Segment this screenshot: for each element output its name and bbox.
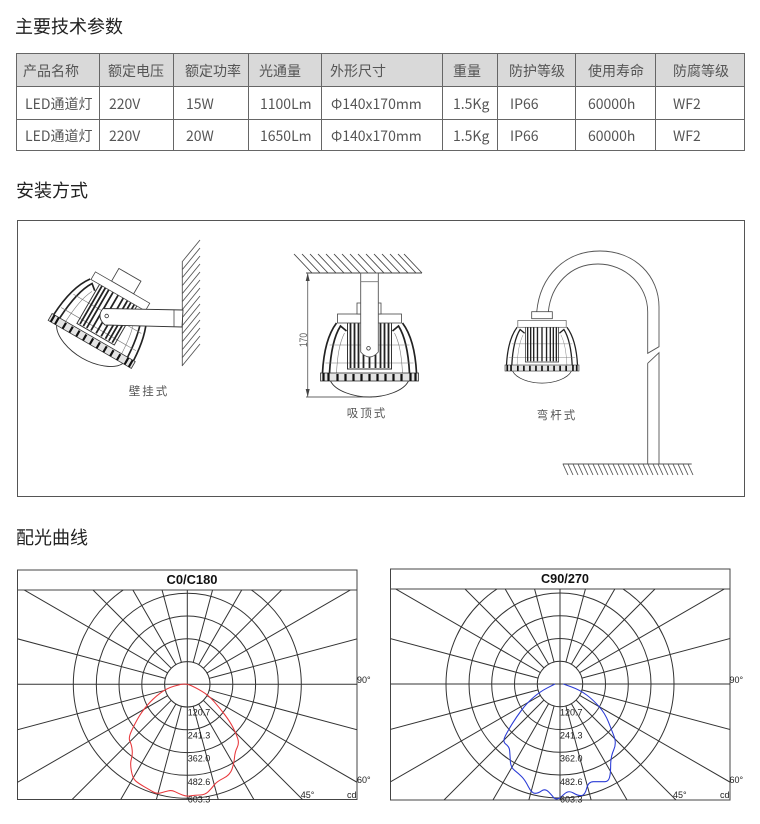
ceiling stem [361,273,378,357]
heading: light distribution curves: 配光曲线 [16,524,88,550]
dimension line 170 [306,273,372,397]
table: technical parameters: 光通量 [259,60,301,80]
polar grid [389,570,731,801]
pole collar [532,312,552,319]
chart: C90/270 polar curve [389,569,744,804]
heading: main technical parameters: 主要技术参数 [15,13,123,39]
table: technical parameters: 产品名称 [23,60,79,80]
candela scale labels: 482.6 [560,777,583,787]
chart title: C90/270 [541,572,589,586]
polar grid [16,570,358,801]
diagram: bent pole mount [505,251,693,475]
pole lamp [505,320,579,383]
candela scale labels: 603.3 [560,794,583,804]
table: technical parameters: LED通道灯 [25,126,92,146]
ceiling lamp [320,314,418,397]
candela scale labels: 60° [730,775,744,785]
table: technical parameters: 额定功率 [185,60,241,80]
table: technical parameters: 1100Lm [260,94,312,114]
candela scale labels: 603.3 [188,794,210,804]
candela scale labels: 60° [357,775,371,785]
table: technical parameters: 60000h [588,126,635,146]
table: technical parameters: Φ140x170mm [331,126,422,146]
table: technical parameters: IP66 [510,94,539,114]
table: technical parameters: 1.5Kg [453,126,489,146]
table: technical parameters: 220V [109,94,140,114]
ground with hatching [563,464,693,475]
label: wall mount: 壁挂式 [129,383,169,399]
table: technical parameters: 防腐等级 [673,60,729,80]
candela scale labels: cd [347,790,357,800]
label: ceiling mount: 吸顶式 [347,405,387,421]
candela scale labels: 90° [730,675,744,685]
table: technical parameters [16,53,745,151]
table: technical parameters: WF2 [673,94,701,114]
label: pole mount: 弯杆式 [537,407,577,423]
wall with hatching [182,240,200,366]
table: technical parameters: 1.5Kg [453,94,489,114]
dimension label: 170 [298,333,310,347]
chart frame [18,570,357,800]
table: technical parameters: 重量 [453,60,481,80]
bolts [357,303,381,314]
heading: installation methods: 安装方式 [16,177,88,203]
table: technical parameters: 额定电压 [108,60,164,80]
table: technical parameters: 使用寿命 [588,60,644,80]
chart frame [390,569,730,800]
candela scale labels [188,675,371,804]
candela scale labels: 90° [357,675,371,685]
candela scale labels: 241.3 [188,731,210,741]
chart title: C0/C180 [166,573,218,587]
candela scale labels: 120.7 [560,708,583,718]
candela scale labels [560,675,744,804]
wall-mounted lamp [40,251,172,382]
candela scale labels: 482.6 [188,777,210,787]
panel: installation methods frame [18,220,744,496]
diagram: wall mount [40,240,200,399]
wall arm [100,308,183,327]
table: technical parameters: WF2 [673,126,701,146]
candela scale labels: 45° [673,790,687,800]
candela scale labels: 362.0 [188,754,210,764]
table: technical parameters: 外形尺寸 [330,60,386,80]
bent pole [537,251,659,464]
table: technical parameters: IP66 [510,126,539,146]
blue distribution curve [504,684,615,799]
candela scale labels: 241.3 [560,731,583,741]
table: technical parameters: 15W [186,94,214,114]
table: technical parameters: 60000h [588,94,635,114]
ceiling with hatching [294,254,422,273]
table: technical parameters: 20W [186,126,214,146]
candela scale labels: 362.0 [560,754,583,764]
table: technical parameters: 220V [109,126,140,146]
chart: C0/C180 polar curve [16,570,371,804]
candela scale labels: 45° [301,790,315,800]
table: technical parameters: Φ140x170mm [331,94,422,114]
table: technical parameters: 防护等级 [509,60,565,80]
diagram: ceiling mount [294,254,422,421]
table: technical parameters: LED通道灯 [25,94,92,114]
red distribution curve [129,684,238,796]
table: technical parameters: 1650Lm [260,126,312,146]
candela scale labels: 120.7 [188,708,210,718]
candela scale labels: cd [720,790,730,800]
